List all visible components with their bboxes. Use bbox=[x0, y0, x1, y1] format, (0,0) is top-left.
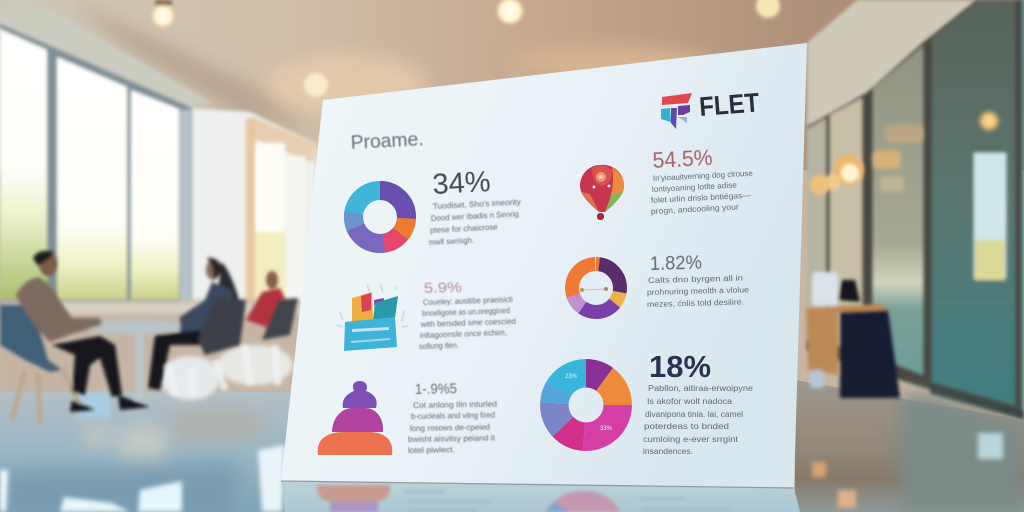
ceiling bbox=[0, 0, 1024, 170]
poster sheet bbox=[281, 43, 807, 488]
value: 54.5% bbox=[652, 145, 713, 173]
woman in navy bbox=[148, 258, 246, 390]
right glass wall bbox=[807, 0, 1024, 420]
right bokeh lights bbox=[873, 111, 999, 192]
description: inltagoonsle once echim, bbox=[420, 328, 507, 340]
description: prohnuring meolth a vlolue bbox=[647, 285, 750, 297]
description: Tuodiset, Sho's imeority bbox=[433, 197, 521, 211]
donut chart bbox=[554, 373, 618, 437]
description: cumloing e-ever srrgint bbox=[643, 435, 739, 444]
desk bbox=[806, 272, 900, 398]
value: 1-.9%5 bbox=[415, 380, 457, 398]
description: mezes, ćnlis told desilire. bbox=[647, 297, 744, 309]
right soffit bbox=[807, 0, 977, 127]
stat block: 34% bbox=[354, 166, 521, 247]
stat block: 1-9% bbox=[318, 380, 497, 455]
description: Pabllon, aitiraa-erwoipyne bbox=[648, 384, 754, 393]
floor left bbox=[0, 392, 320, 512]
reflection surface bbox=[281, 481, 800, 512]
description: lontiyoaning lotlte adise bbox=[652, 181, 738, 194]
chart labels bbox=[565, 374, 613, 432]
donut chart bbox=[572, 264, 620, 312]
description: Coueley: ausitibe praeisicti bbox=[423, 295, 513, 307]
description: progn, andcooling your bbox=[651, 202, 739, 216]
description: divanipona tinia. lai, camel bbox=[645, 410, 743, 419]
table bbox=[85, 320, 185, 400]
chart labels: 33% bbox=[600, 426, 613, 432]
lower wall behind people bbox=[0, 300, 320, 395]
man with chair bbox=[0, 251, 150, 425]
right floor highlights bbox=[812, 433, 1003, 508]
description bbox=[643, 384, 754, 456]
far windows bbox=[246, 117, 316, 308]
description bbox=[408, 400, 497, 455]
description: Dood wer Ibadis n Senrig bbox=[431, 209, 519, 223]
icon: folder with cards bbox=[337, 284, 408, 351]
stat block: 54.5% bbox=[580, 145, 753, 220]
left wall bbox=[185, 108, 316, 320]
floor highlights bbox=[5, 410, 260, 512]
left window soffit bbox=[0, 0, 213, 108]
description bbox=[647, 274, 750, 309]
poster reflection on table bbox=[281, 481, 800, 512]
bottom edge shadow bbox=[281, 481, 794, 488]
people at table bbox=[0, 251, 298, 425]
description: with bersded sme coescied bbox=[420, 317, 516, 329]
description: bnoeligose as un,oreggined bbox=[422, 306, 510, 318]
logo wordmark: FLET bbox=[698, 87, 761, 122]
description: Calts dno byrgen all in bbox=[648, 274, 743, 285]
description: Is akofor wolt nadoca bbox=[647, 397, 733, 406]
paper bbox=[281, 43, 807, 488]
icon: hot air balloon bbox=[580, 165, 624, 220]
left windows bbox=[0, 24, 192, 320]
ceiling lamps bbox=[152, 0, 780, 97]
description: b-cucleals and vilng fired bbox=[411, 411, 495, 421]
description: long rosows de-cpeied bbox=[410, 423, 490, 433]
description: lotel piwlect. bbox=[408, 445, 455, 455]
chart labels: 23% bbox=[565, 374, 578, 380]
donut chart bbox=[354, 190, 406, 244]
value: 34% bbox=[432, 166, 491, 201]
floor bright patches bbox=[0, 345, 293, 512]
description: Cot anlong Ilin inturled bbox=[413, 400, 497, 410]
stat block: 1.82% bbox=[572, 253, 750, 312]
description bbox=[419, 295, 516, 351]
third person in red bbox=[168, 271, 298, 395]
floor right bbox=[795, 380, 1024, 512]
description: insandences. bbox=[643, 447, 693, 456]
description bbox=[429, 197, 521, 247]
description: sofiung tlen. bbox=[419, 341, 459, 351]
poster title: Proame. bbox=[350, 129, 424, 154]
value: 5.9% bbox=[424, 279, 462, 297]
right floor details bbox=[900, 395, 1024, 512]
value: 1.82% bbox=[650, 253, 702, 275]
warm ceiling glow bbox=[70, 0, 710, 130]
logo mark bbox=[661, 93, 692, 129]
value: 18% bbox=[649, 349, 711, 384]
description: In'yioauitverning dog clrouse bbox=[653, 169, 753, 183]
clustered bokeh bbox=[810, 155, 864, 195]
description: ptese for chaicrose bbox=[430, 222, 499, 235]
description: bwisht aisvilsy peiand it bbox=[408, 433, 496, 444]
description: mwll swrisgh. bbox=[429, 236, 474, 247]
donut centre marker bbox=[580, 287, 608, 292]
description bbox=[651, 169, 753, 216]
logo bbox=[661, 87, 761, 129]
reflected shapes bbox=[317, 485, 730, 512]
description: folet urlin drislo bntiégas— bbox=[651, 191, 751, 205]
stat block: 5.9% bbox=[337, 279, 516, 351]
description: poterdeas to bnded bbox=[644, 422, 729, 431]
stat block: 18% bbox=[554, 349, 754, 456]
icon: stacked pyramid bbox=[318, 381, 392, 455]
